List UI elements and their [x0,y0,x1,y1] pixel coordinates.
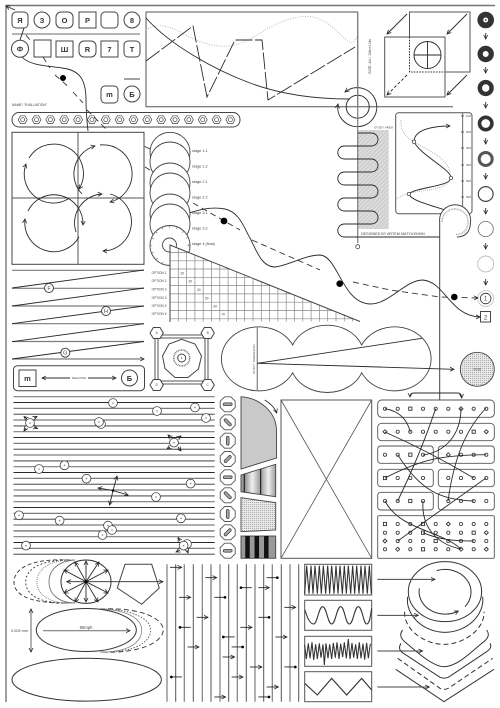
keyboard symbol buttons: 7 [107,45,112,54]
relation panel: RELATION [72,376,86,380]
triangular grid chart: OPTION 1 [152,271,167,275]
scale curve panel: 200 [466,130,471,134]
keyboard symbol buttons: Р [85,16,90,25]
stage labels: stage 3.2 [192,226,208,230]
keyboard symbol buttons: Ш [61,45,69,54]
stage labels: stage 1.2 [192,164,208,168]
wavy flow curve [22,57,480,317]
octagon frame diagram: A [156,331,159,335]
meander with study area [338,12,457,249]
stage labels: stage 2.2 [192,196,208,200]
dashed flow line [6,6,478,298]
name label: NAME: "EVALUATION" [12,103,48,107]
triangular grid chart: 20 [180,272,184,276]
X placeholder panel [281,400,372,558]
triangular grid chart: 60 [214,304,217,308]
black nodes [60,75,458,300]
target ring [338,88,377,127]
triple lobe blob [221,325,454,392]
keyboard symbol buttons: О [62,16,68,25]
scale curve panel [396,113,472,214]
scale curve panel: 100 [466,114,471,118]
keyboard symbol buttons: Ф [17,44,24,54]
size label: SIZE: A4 / 10in×14in [368,39,372,74]
stage circle stack [150,132,190,266]
concentric disc sequence: 1 [484,296,488,302]
striped staff lines [14,397,215,554]
vertical lines with ticks [167,564,299,702]
diagonal line rows [12,270,144,359]
relation panel: Б [127,374,133,383]
triangular grid chart: OPTION 6 [152,312,167,316]
shaded shapes column [241,397,277,558]
octagon frame diagram: B [207,331,209,335]
concentric disc sequence: 2 [484,316,488,322]
rounded corner ring and trunk line [440,205,471,400]
triangular grid chart: OPTION 3 [152,296,167,300]
triangular grid chart: OPTION 2 [152,279,167,283]
diagonal line rows: G [63,351,67,357]
stage labels: stage 4 (final) [192,242,216,246]
stage labels: stage 1.1 [192,149,208,153]
bottom ellipse [12,658,161,701]
node panels [378,393,494,558]
hexagon bar [12,112,240,127]
octagon frame diagram: D [156,383,159,387]
cube diagram [385,12,470,97]
meander with study area: STUDY AREA [374,126,393,130]
waveform panels [305,564,372,702]
stage labels: stage 2.1 [192,180,208,184]
dotted void circle: VOID [473,368,482,372]
keyboard symbol buttons: 8 [130,16,134,25]
triangular grid chart: 70 [222,312,225,316]
expanding ellipse arcs and radial burst [14,560,163,603]
speed ellipse: 0.003 mm [11,629,28,633]
scale curve panel: 500 [466,179,471,183]
stage labels: stage 3.1 [192,211,208,215]
keyboard symbol buttons: Б [129,90,135,99]
speed ellipse: 50mph [80,625,93,630]
octagon bar column [217,397,238,558]
concentric disc sequence [478,15,494,322]
keyboard symbol buttons: З [40,16,45,25]
scale curve panel: 600 [466,195,471,199]
diagonal line rows: F [47,286,51,292]
layered ring to diamond stack [377,562,494,702]
triangular grid chart: OPTION 3 [152,288,167,292]
quadrant circles panel [12,132,144,264]
line chart panel [146,12,453,107]
scale curve panel: 300 [466,146,471,150]
triangular grid chart: OPTION 5 [152,304,167,308]
triangular grid chart [152,245,360,322]
speed ellipse [11,608,163,652]
dotted void circle [460,352,494,386]
diagonal line rows: H [104,309,108,315]
octagon frame diagram [150,328,214,390]
keyboard symbol buttons: Я [17,16,23,25]
octagon frame diagram: C [207,383,210,387]
relation panel: m [24,374,31,383]
triple lobe blob: DUSTY THRESHOLD [252,343,256,374]
keyboard symbol buttons: m [106,90,113,99]
triangular grid chart: 50 [205,296,209,300]
pentagon [117,564,159,604]
stage labels [192,149,216,246]
meander with study area: DESIGNED BY ARTEM MATYUSHKIN [361,232,425,236]
triangular grid chart: 30 [188,280,192,284]
keyboard symbol buttons [12,12,140,103]
keyboard symbol buttons: T [130,45,135,54]
triangular grid chart: 40 [197,288,201,292]
scale curve panel: 400 [466,163,471,167]
octagon frame diagram: F [181,356,183,360]
keyboard symbol buttons: R [85,45,91,54]
relation panel [14,366,144,391]
